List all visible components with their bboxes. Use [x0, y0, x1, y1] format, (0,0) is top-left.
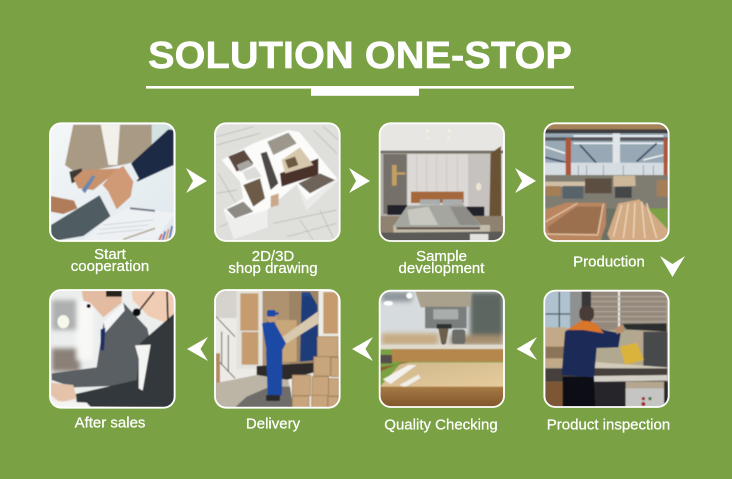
label: sample development: development [399, 260, 485, 277]
panel: 2D/3D shop drawing [215, 123, 340, 277]
label: sample development: Sample [416, 248, 467, 265]
photo: factory floor [544, 123, 669, 242]
label: 2D/3D shop drawing: shop drawing [228, 260, 318, 277]
panel: sample development [379, 123, 505, 277]
label: sample development [399, 248, 485, 277]
title underline [146, 86, 574, 96]
label: start cooperation: Start [94, 246, 127, 263]
photo: CNC on chipboard [379, 290, 504, 408]
panel: product inspection [544, 290, 670, 434]
photo: bedroom [379, 123, 505, 242]
label: quality checking: Quality Checking [384, 416, 498, 434]
label: 2D/3D shop drawing: 2D/3D [252, 248, 294, 265]
label: start cooperation [71, 246, 149, 275]
photo: worker at saw [544, 290, 669, 408]
arrow left 2 [352, 337, 373, 361]
label: product inspection: Product inspection [547, 416, 670, 434]
arrow down [660, 256, 685, 277]
label: after sales: After sales [75, 414, 145, 432]
panel: production [544, 123, 669, 270]
label: delivery: Delivery [246, 416, 301, 432]
photo: isometric floor plan [215, 123, 340, 241]
arrow right 1 [186, 168, 207, 193]
panel: start cooperation [50, 123, 175, 275]
arrow left 3 [516, 337, 537, 360]
arrow left 1 [187, 337, 208, 361]
panel: quality checking [379, 290, 504, 434]
photo: loading a van [215, 290, 340, 409]
label: 2D/3D shop drawing [228, 248, 318, 277]
label: production: Production [573, 254, 645, 270]
photo: handshake [50, 123, 175, 241]
title: SOLUTION ONE-STOP [148, 35, 572, 77]
arrow right 3 [515, 168, 536, 193]
panel: after sales [50, 290, 175, 432]
panel: delivery [215, 290, 340, 432]
arrow right 2 [349, 168, 370, 193]
label: start cooperation: cooperation [71, 258, 149, 275]
photo: call-centre agents [50, 290, 175, 408]
